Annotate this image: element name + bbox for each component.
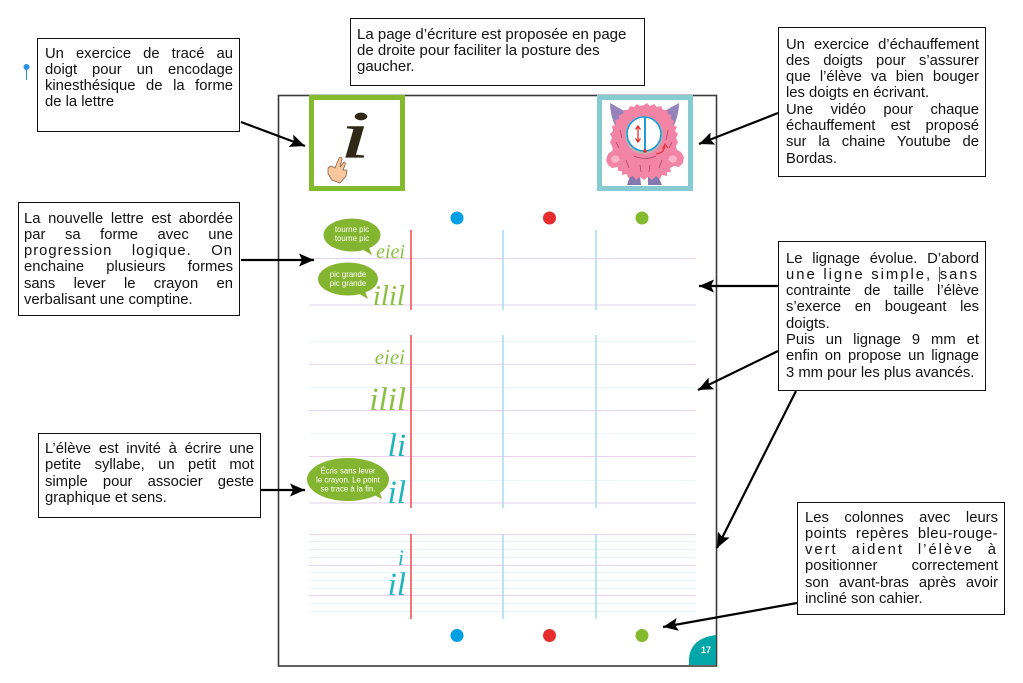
icon: finger tracing letter i: i (340, 97, 370, 172)
callout: syllable writing (38, 433, 261, 518)
callout: syllable writing: L’élève est invité à écrire une (45, 441, 254, 457)
callout: syllable writing: simple pour associer geste (45, 474, 254, 490)
callout: finger tracing: Un exercice de tracé au (45, 46, 233, 62)
callout: coloured columns: vert aident l’élève à (805, 542, 998, 558)
speech bubble: pic grande: pic grande (330, 270, 366, 279)
column rules (411, 230, 596, 619)
callout: coloured columns: positionner correctement (805, 558, 998, 574)
icon: blue pin (24, 64, 30, 80)
callout: finger warm-up (778, 27, 986, 177)
speech bubble: pic grande (318, 262, 378, 299)
icon: pink monster warm-up (600, 98, 690, 188)
callout: new letter shape: par sa forme avec une (24, 227, 233, 243)
page number corner (689, 635, 716, 665)
model letters teal: il (388, 567, 406, 603)
workbook page (278, 96, 716, 666)
callout: finger warm-up: Un exercice d’échauffement (786, 36, 979, 52)
model letters green: eiei (375, 345, 405, 369)
model letters teal: li (388, 428, 406, 464)
callout: finger tracing: doigt pour un encodage (45, 62, 233, 78)
model letters teal: il (388, 475, 406, 511)
guide dots top (450, 212, 648, 224)
callout: finger tracing (37, 38, 240, 132)
ruling: 3 mm lines (309, 534, 696, 612)
callout: new letter shape (18, 202, 240, 316)
speech bubble: instruction: Écris sans lever (320, 466, 376, 476)
callout: line ruling: doigts. (786, 316, 830, 332)
callout: syllable writing: petite syllabe, un petit mot (45, 457, 254, 473)
callout: finger warm-up: Une vidéo pour chaque (786, 102, 979, 118)
callout: line ruling: Le lignage évolue. D’abord (786, 250, 979, 266)
callout: line ruling (778, 241, 986, 391)
callout: syllable writing: graphique et sens. (45, 490, 167, 506)
speech bubble: instruction: le crayon. Le point (316, 476, 381, 484)
model letters green: ilil (369, 382, 406, 418)
callout: right-hand page: gaucher. (357, 58, 415, 75)
callout: finger tracing: kinesthésique de la forme (45, 78, 233, 94)
callout: new letter shape: La nouvelle lettre est abordée (24, 210, 233, 226)
callout: new letter shape: sans lever le crayon en (24, 276, 233, 292)
callout: line ruling: enfin on propose un lignage (786, 348, 979, 364)
speech bubble: pic grande: pic grande (330, 279, 366, 288)
speech bubble: instruction: se trace à la fin. (320, 484, 376, 494)
callout: right-hand page: La page d’écriture est proposée en page (357, 26, 626, 42)
speech bubble: tourne pic: tourne pic (335, 234, 369, 243)
callout: coloured columns: incliné son cahier. (805, 591, 923, 607)
callout: line ruling: une ligne simple, sans (786, 267, 979, 283)
model letters teal: i (398, 545, 404, 570)
callout: right-hand page: de droite pour faciliter la posture des (357, 42, 600, 59)
callout: new letter shape: verbalisant une comptine. (24, 292, 193, 308)
page number corner: 17 (701, 645, 711, 655)
arrows (241, 113, 797, 627)
callout: finger warm-up: que l’élève va bien bouger (786, 69, 979, 85)
callout: finger warm-up: les doigts en écrivant. (786, 85, 929, 101)
guide dots bottom (450, 629, 648, 642)
callout: right-hand page (350, 18, 645, 86)
callout: finger warm-up: sur la chaine Youtube de (786, 134, 979, 150)
callout: new letter shape: enchaine plusieurs formes (24, 259, 233, 275)
callout: coloured columns: son avant-bras après avoir (805, 575, 998, 591)
model letters green (369, 241, 406, 418)
callout: line ruling: 3 mm pour les plus avancés. (786, 365, 974, 381)
callout: coloured columns: points repères bleu-rouge- (805, 526, 998, 542)
speech bubble: instruction (307, 458, 389, 501)
ruling: 9 mm lines (309, 342, 696, 503)
callout: line ruling: s’exerce en bougeant les (786, 299, 979, 315)
model letters green: eiei (376, 241, 405, 263)
callout: finger tracing: de la lettre (45, 94, 114, 110)
callout: new letter shape: progression logique. On (24, 243, 233, 259)
callout: coloured columns (797, 502, 1005, 615)
model letters green: ilil (373, 280, 405, 312)
model letters teal (388, 428, 406, 603)
callout: line ruling: Puis un lignage 9 mm et (786, 332, 979, 348)
callout: finger warm-up: des doigts pour s’assurer (786, 53, 979, 69)
ruling: simple lines (309, 258, 696, 305)
icon: finger tracing letter i (312, 97, 402, 188)
callout: finger warm-up: Bordas. (786, 151, 837, 167)
callout: line ruling: contrainte de taille l’élève (786, 283, 979, 299)
callout: finger warm-up: échauffement est proposé (786, 118, 979, 134)
speech bubble: tourne pic (324, 218, 380, 255)
callout: coloured columns: Les colonnes avec leurs (805, 510, 998, 526)
speech bubble: tourne pic: tourne pic (335, 225, 369, 234)
